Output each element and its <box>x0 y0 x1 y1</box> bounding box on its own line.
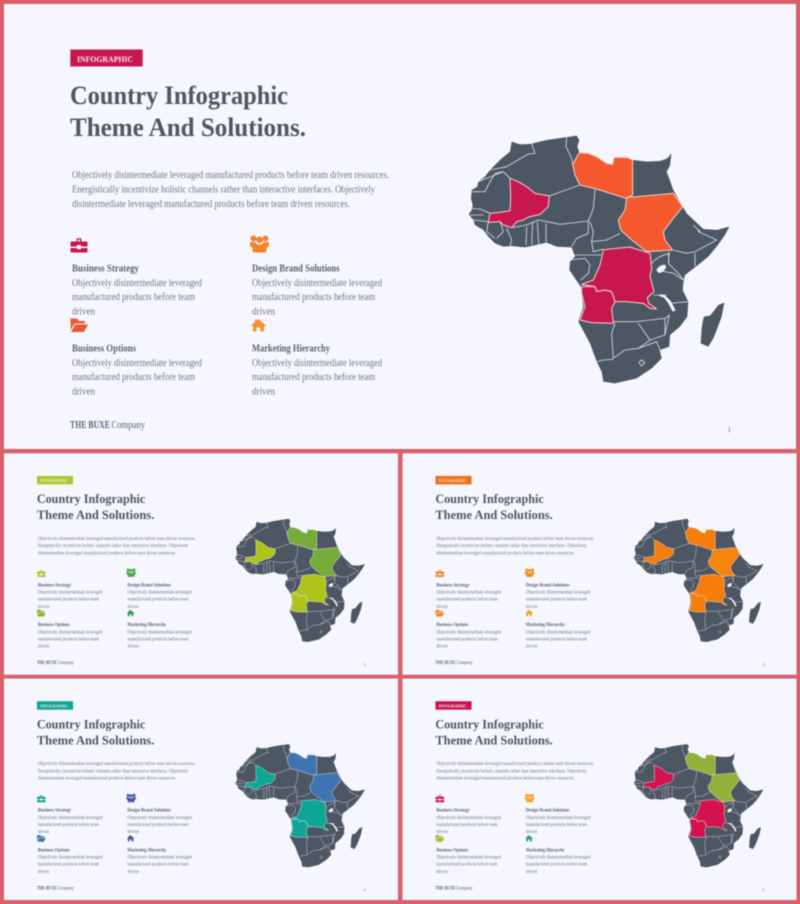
slide 1 text content <box>70 50 389 431</box>
slide 4 page number: 4 <box>364 888 366 893</box>
slide 3 page number: 3 <box>762 662 764 667</box>
slide 2 text content <box>37 476 196 666</box>
slide 1 page number: 1 <box>728 426 732 434</box>
slide 4 text content <box>37 701 196 892</box>
slide 4 Africa map <box>235 744 365 867</box>
slide 2: green slide <box>4 453 398 675</box>
slide 2 icons <box>37 568 136 616</box>
slide 4 icons <box>37 794 136 842</box>
slide 3: orange slide <box>402 453 797 675</box>
slide 3 icons <box>436 568 534 616</box>
slide 5 page number: 5 <box>762 888 764 893</box>
slide 5 text content <box>435 701 594 892</box>
slide 1: large crimson and orange slide <box>4 4 796 449</box>
slide 5: crimson and olive slide <box>402 679 797 900</box>
slide 3 Africa map <box>634 519 763 642</box>
slide 1 icons <box>70 236 269 332</box>
slide 5 icons <box>436 794 534 842</box>
slide 2 page number: 2 <box>364 662 366 667</box>
slide 5 Africa map <box>634 744 763 867</box>
slide 3 text content <box>435 476 594 666</box>
slide 1 Africa map <box>469 136 729 383</box>
slide 2 Africa map <box>235 519 365 642</box>
slide 4: teal and blue slide <box>4 679 398 900</box>
